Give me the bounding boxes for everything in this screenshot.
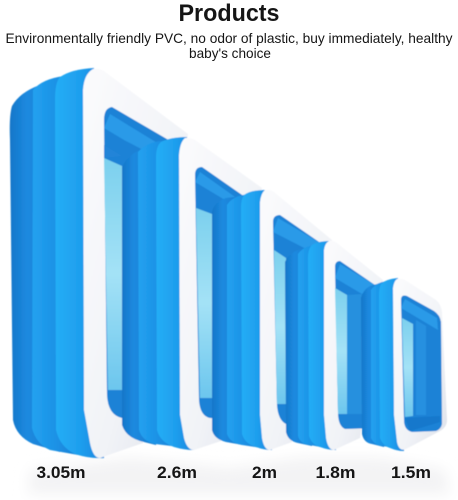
size labels: 3.05m xyxy=(36,463,86,482)
pool water xyxy=(402,318,413,417)
subtitle: Environmentally friendly PVC, no odor of plastic, buy immediately, healthy xyxy=(6,30,452,46)
pool 1.8m xyxy=(285,241,383,450)
pool 2m xyxy=(212,190,332,450)
pool white frame xyxy=(83,69,188,458)
pool inner wall xyxy=(104,107,172,420)
pool inner wall xyxy=(401,296,442,432)
pool inner wall xyxy=(195,167,245,420)
floor shadow xyxy=(28,458,450,494)
size labels xyxy=(36,463,431,482)
pool front tube xyxy=(55,68,104,458)
title: Products xyxy=(178,0,280,27)
pool 3.05m xyxy=(10,68,188,458)
pool white frame xyxy=(324,241,383,450)
subtitle xyxy=(6,30,452,61)
subtitle: baby's choice xyxy=(189,45,271,61)
pool white frame xyxy=(393,279,447,450)
pool water xyxy=(274,250,286,404)
size labels: 2.6m xyxy=(157,463,197,482)
pool white frame xyxy=(260,190,332,450)
size labels: 2m xyxy=(252,463,277,482)
pool inner wall xyxy=(335,261,375,429)
pools group xyxy=(10,68,447,458)
pool water xyxy=(335,288,347,414)
pool 1.5m xyxy=(361,278,447,451)
pool white frame xyxy=(179,138,262,450)
pool water xyxy=(196,208,212,398)
pool inner wall xyxy=(273,215,322,424)
size labels: 1.8m xyxy=(316,463,356,482)
size labels: 1.5m xyxy=(391,463,431,482)
pool middle tube xyxy=(32,72,84,456)
pool water xyxy=(104,158,122,390)
pool rear tube xyxy=(10,80,60,452)
pool 2.6m xyxy=(122,137,262,450)
